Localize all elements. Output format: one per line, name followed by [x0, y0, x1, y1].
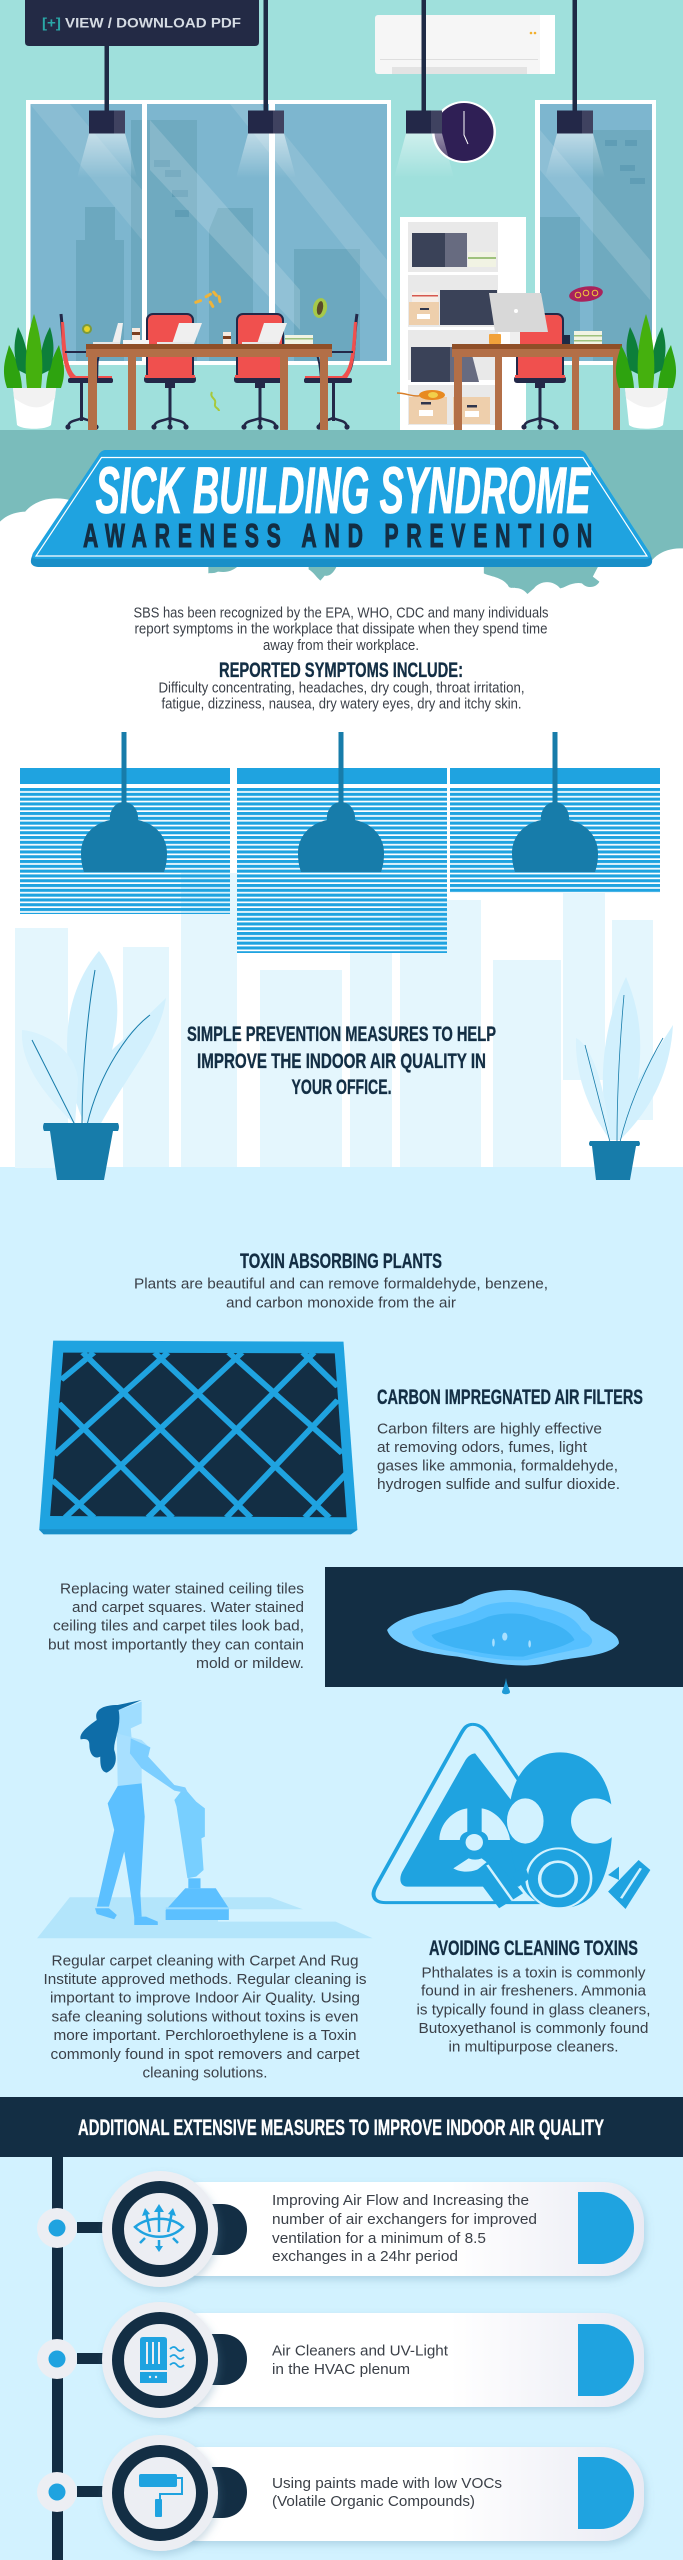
description: is typically found in glass cleaners,	[416, 2002, 650, 2018]
text: ceiling tiles: and carpet squares. Water stained	[72, 1600, 304, 1616]
text	[272, 2476, 502, 2510]
PDF button: [+] VIEW / DOWNLOAD PDF	[42, 14, 241, 30]
section: toxin absorbing plants	[134, 1249, 548, 1312]
text: carpet cleaning	[44, 1954, 367, 2082]
text: ceiling tiles: ceiling tiles and carpet tiles look bad,	[53, 1618, 304, 1634]
description: Carbon filters are highly effective	[377, 1422, 602, 1438]
text	[272, 2344, 448, 2378]
text: ceiling tiles: mold or mildew.	[196, 1656, 304, 1672]
description: hydrogen sulfide and sulfur dioxide.	[377, 1477, 620, 1493]
text: ceiling tiles: Replacing water stained ceiling tiles	[60, 1582, 304, 1598]
heading: simple prevention measures	[187, 1022, 496, 1099]
heading: simple prevention measures: SIMPLE PREVENTION MEASURES TO HELP	[187, 1022, 496, 1046]
description: and carbon monoxide from the air	[226, 1296, 456, 1312]
title banner	[31, 450, 652, 567]
banner: additional measures	[0, 2097, 683, 2157]
text: ventilation for a minimum of 8.5	[272, 2231, 486, 2247]
description: Phthalates is a toxin is commonly	[422, 1966, 646, 1982]
icon: air purifier	[140, 2337, 184, 2383]
text: ceiling tiles: but most importantly they can contain	[48, 1638, 304, 1654]
gas mask	[473, 1752, 650, 1909]
water drip	[502, 1678, 510, 1694]
intro text: SBS has been recognized by the EPA, WHO, CDC and many individuals	[134, 606, 548, 622]
symptoms text: Difficulty concentrating, headaches, dry cough, throat irritation,	[158, 680, 524, 696]
heading: simple prevention measures: IMPROVE THE INDOOR AIR QUALITY IN	[197, 1049, 486, 1073]
symptoms text	[158, 680, 524, 712]
illustration: woman vacuuming	[37, 1700, 373, 1938]
item: air flow	[37, 2171, 644, 2287]
text: Improving Air Flow and Increasing the	[272, 2193, 529, 2209]
windows	[26, 100, 656, 365]
intro text: away from their workplace.	[263, 638, 419, 654]
text: carpet cleaning: safe cleaning solutions without toxins is even	[52, 2010, 358, 2026]
intro text	[134, 606, 548, 654]
text: number of air exchangers for improved	[272, 2212, 537, 2228]
description	[416, 1966, 650, 2056]
side desk	[452, 344, 622, 430]
germs	[82, 284, 604, 411]
icon: carbon air filter	[39, 1341, 357, 1534]
text: (Volatile Organic Compounds)	[272, 2494, 475, 2510]
vacuum	[166, 1792, 229, 1920]
clouds	[0, 498, 683, 598]
icon: paint roller	[139, 2474, 182, 2517]
white background section	[0, 567, 683, 1167]
description: gases like ammonia, formaldehyde,	[377, 1458, 618, 1474]
text: carpet cleaning: cleaning solutions.	[142, 2066, 268, 2082]
symptoms text: fatigue, dizziness, nausea, dry watery eyes, dry and itchy skin.	[162, 696, 522, 712]
description	[377, 1422, 620, 1493]
text	[272, 2193, 537, 2265]
hanging lamps	[81, 732, 598, 872]
text: carpet cleaning: commonly found in spot removers and carpet	[50, 2047, 360, 2063]
hazard triangle	[374, 1724, 541, 1903]
text: carpet cleaning: Regular carpet cleaning with Carpet And Rug	[52, 1954, 358, 1970]
item: air cleaners	[37, 2302, 644, 2418]
text: Using paints made with low VOCs	[272, 2476, 502, 2492]
bookshelf	[400, 217, 526, 430]
text: carpet cleaning: more important. Perchloroethylene is a Toxin	[54, 2028, 356, 2044]
woman	[80, 1700, 188, 1925]
section: avoiding cleaning toxins	[416, 1936, 650, 2056]
city skyline	[15, 873, 653, 1168]
light blue background section	[0, 1167, 683, 2560]
icon: air flow arrows	[135, 2204, 183, 2252]
panel: ceiling water stain	[325, 1567, 683, 1687]
section: carbon air filters	[377, 1385, 643, 1493]
text: ceiling tiles	[48, 1582, 304, 1672]
window blinds	[20, 768, 660, 953]
item: low VOC paints	[37, 2435, 644, 2551]
description: at removing odors, fumes, light	[377, 1440, 587, 1456]
description: Plants are beautiful and can remove formaldehyde, benzene,	[134, 1276, 548, 1292]
office chairs	[61, 314, 566, 430]
pendant lights	[77, 0, 605, 178]
icon: hazard sign and gas mask	[374, 1724, 650, 1909]
conference desk	[86, 344, 332, 430]
text: exchanges in a 24hr period	[272, 2249, 458, 2265]
floor and sky band	[0, 430, 683, 567]
description: Butoxyethanol is commonly found	[418, 2021, 648, 2037]
heading: TOXIN ABSORBING PLANTS	[240, 1249, 442, 1273]
desk items	[93, 293, 602, 344]
carpet	[37, 1897, 373, 1938]
potted plants	[4, 314, 676, 429]
text: carpet cleaning: Institute approved methods. Regular cleaning is	[44, 1972, 367, 1988]
right plant	[576, 977, 673, 1180]
heading: simple prevention measures: YOUR OFFICE.	[292, 1075, 392, 1099]
air conditioner	[375, 15, 555, 74]
heading: reported symptoms: REPORTED SYMPTOMS INCLUDE:	[219, 658, 463, 682]
background: office wall	[0, 0, 683, 430]
text: carpet cleaning: important to improve Indoor Air Quality. Using	[50, 1990, 360, 2006]
description: in multipurpose cleaners.	[448, 2040, 618, 2056]
text: in the HVAC plenum	[272, 2362, 410, 2378]
intro text: report symptoms in the workplace that dissipate when they spend time	[134, 622, 548, 638]
panel: office scene	[4, 0, 676, 430]
text: Air Cleaners and UV-Light	[272, 2344, 448, 2360]
description: found in air fresheners. Ammonia	[421, 1984, 647, 2000]
left plant	[22, 951, 166, 1180]
clock	[432, 101, 496, 163]
timeline line	[52, 2157, 63, 2560]
PDF button	[25, 0, 259, 46]
description	[134, 1276, 548, 1312]
